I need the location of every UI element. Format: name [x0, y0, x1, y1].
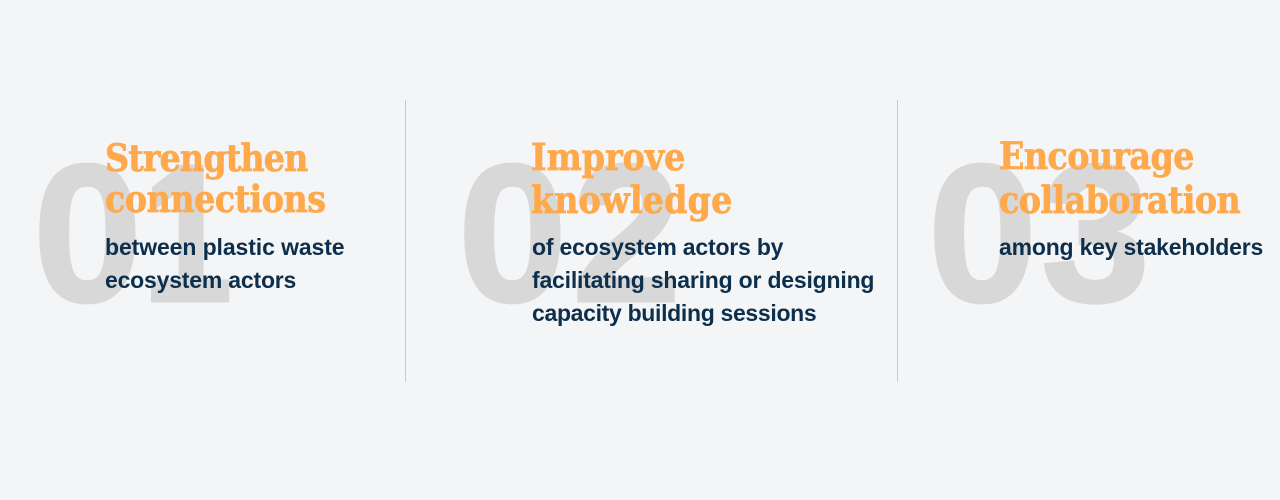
text: between plastic waste ecosystem actors: ecosystem actors [105, 267, 296, 293]
heading: Encourage collaboration: Encourage [999, 134, 1194, 178]
heading: Strengthen connections: Strengthen [105, 136, 308, 180]
big number 03: 3 [1041, 124, 1150, 343]
text: of ecosystem actors: of ecosystem actors by [532, 234, 783, 260]
big number 01: 0 [33, 124, 142, 343]
text: among key stakeholders: among key stakeholders [999, 234, 1263, 260]
big number 02: 0 [458, 124, 567, 343]
heading: Improve knowledge: Improve [531, 135, 685, 179]
heading: Strengthen connections: connections [105, 177, 326, 221]
heading: Improve knowledge: knowledge [531, 178, 732, 222]
text: of ecosystem actors: capacity building sessions [532, 300, 816, 326]
big number 03: 0 [928, 124, 1037, 343]
text: between plastic waste ecosystem actors: between plastic waste [105, 234, 344, 260]
text: of ecosystem actors [532, 234, 874, 326]
text: of ecosystem actors: facilitating sharing or designing [532, 267, 874, 293]
heading: Encourage collaboration: collaboration [999, 178, 1240, 222]
text: between plastic waste ecosystem actors [105, 234, 344, 293]
big number 01: 1 [142, 124, 232, 343]
big number 02: 2 [572, 124, 681, 343]
